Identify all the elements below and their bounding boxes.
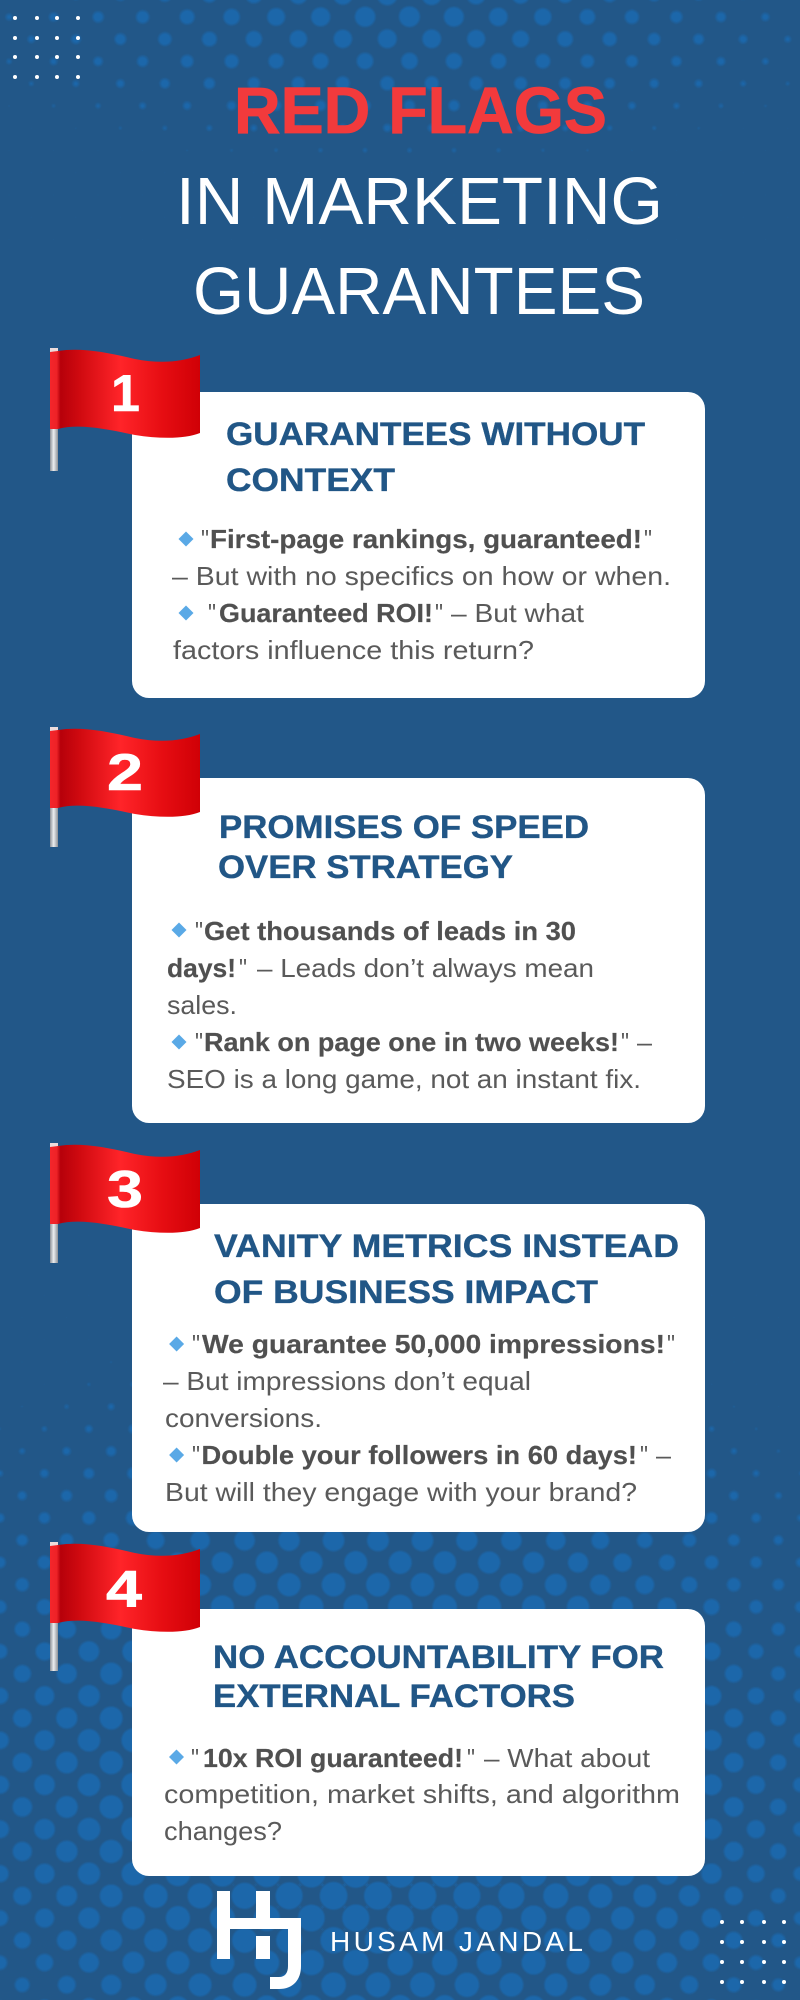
card 1 body text: " <box>435 598 443 628</box>
logo: HJ monogram <box>217 1891 301 1989</box>
card 3 body text: We guarantee 50,000 impressions! <box>202 1329 665 1359</box>
card 4 body text: – What about <box>484 1743 651 1773</box>
halftone dots: top <box>5 0 792 153</box>
card 4 body text: " <box>191 1743 199 1773</box>
card 1 body text: – But what <box>451 598 585 628</box>
panel: card 2 <box>132 778 705 1123</box>
card 1 heading: CONTEXT <box>226 462 396 498</box>
card 2 body text: " <box>239 953 247 983</box>
card 1 body text <box>172 524 671 665</box>
card 1 body text: " <box>644 524 652 554</box>
icon: flag 2 <box>50 727 200 847</box>
title <box>176 73 663 329</box>
title line: in marketing: IN MARKETING <box>176 164 663 239</box>
card 4 body text: " <box>467 1743 475 1773</box>
icon: flag 1: 1 <box>111 365 140 423</box>
card 2 heading <box>218 809 589 885</box>
logo: brand name: HUSAM JANDAL <box>330 1926 583 1957</box>
icon: flag 3: 3 <box>107 1161 143 1219</box>
card 2 heading: OVER STRATEGY <box>218 849 513 885</box>
title line: guarantees: GUARANTEES <box>193 254 645 329</box>
card 2 body text: " <box>195 1027 203 1057</box>
card 1 body text: – But with no specifics on how or when. <box>172 561 671 591</box>
icon: flag 3 <box>50 1143 200 1263</box>
halftone dots: bottom <box>0 1362 800 2000</box>
card 4 background <box>132 1609 705 1876</box>
icon: flag 1 <box>50 348 200 471</box>
card 1 body text: factors influence this return? <box>173 635 534 665</box>
card 1 body text: " <box>208 598 216 628</box>
card 2 body text <box>167 916 653 1094</box>
card 3 body text: – But impressions don’t equal <box>163 1366 531 1396</box>
card 3 body text: – <box>656 1440 672 1470</box>
card 4 body text: 10x ROI guaranteed! <box>203 1743 463 1773</box>
card 4 body text <box>164 1743 680 1846</box>
card 3 body text: " <box>192 1440 200 1470</box>
card 3 body text: Double your followers in 60 days! <box>202 1440 637 1470</box>
dot grid: top left <box>13 16 80 79</box>
card 1 body text: " <box>201 524 209 554</box>
card 1 body text: First-page rankings, guaranteed! <box>210 524 642 554</box>
card 2 heading: PROMISES OF SPEED <box>219 809 589 845</box>
card 3 heading: VANITY METRICS INSTEAD <box>214 1228 679 1264</box>
icon: flag 4 <box>50 1542 200 1671</box>
card 3 body text: " <box>667 1329 675 1359</box>
card 2 body text: " <box>195 916 203 946</box>
card 4 heading: NO ACCOUNTABILITY FOR <box>213 1639 664 1675</box>
card 2 body text: – Leads don’t always mean <box>257 953 594 983</box>
card 2 body text: – <box>637 1027 653 1057</box>
card 2 body text: " <box>621 1027 629 1057</box>
card 2 background <box>132 778 705 1123</box>
title line: red flags: RED FLAGS <box>234 73 607 147</box>
card 4 body text: competition, market shifts, and algorithm <box>164 1779 680 1809</box>
card 4 heading <box>213 1639 664 1714</box>
card 3 heading: OF BUSINESS IMPACT <box>214 1274 599 1310</box>
card 2 body text: Rank on page one in two weeks! <box>204 1027 619 1057</box>
panel: card 3 <box>132 1204 705 1532</box>
card 1 background <box>132 392 705 698</box>
card 3 body text: " <box>192 1329 200 1359</box>
card 1 heading <box>226 416 645 498</box>
card 3 heading <box>214 1228 679 1310</box>
card 3 body text: conversions. <box>165 1403 322 1433</box>
card 3 body text: " <box>640 1440 648 1470</box>
card 4 heading: EXTERNAL FACTORS <box>213 1678 575 1714</box>
icon: flag 2: 2 <box>107 744 143 802</box>
card 2 body text: Get thousands of leads in 30 <box>204 916 576 946</box>
card 3 background <box>132 1204 705 1532</box>
card 1 body text: Guaranteed ROI! <box>219 598 433 628</box>
icon: flag 4: 4 <box>106 1561 142 1619</box>
dot grid: bottom right <box>720 1920 786 1984</box>
card 2 body text: days! <box>167 953 236 983</box>
card 2 body text: sales. <box>167 990 237 1020</box>
card 3 body text <box>163 1329 675 1507</box>
card 4 body text: changes? <box>164 1816 282 1846</box>
panel: card 4 <box>132 1609 705 1876</box>
panel: card 1 <box>132 392 705 698</box>
card 1 heading: GUARANTEES WITHOUT <box>226 416 645 452</box>
card 2 body text: SEO is a long game, not an instant fix. <box>167 1064 641 1094</box>
card 3 body text: But will they engage with your brand? <box>165 1477 637 1507</box>
